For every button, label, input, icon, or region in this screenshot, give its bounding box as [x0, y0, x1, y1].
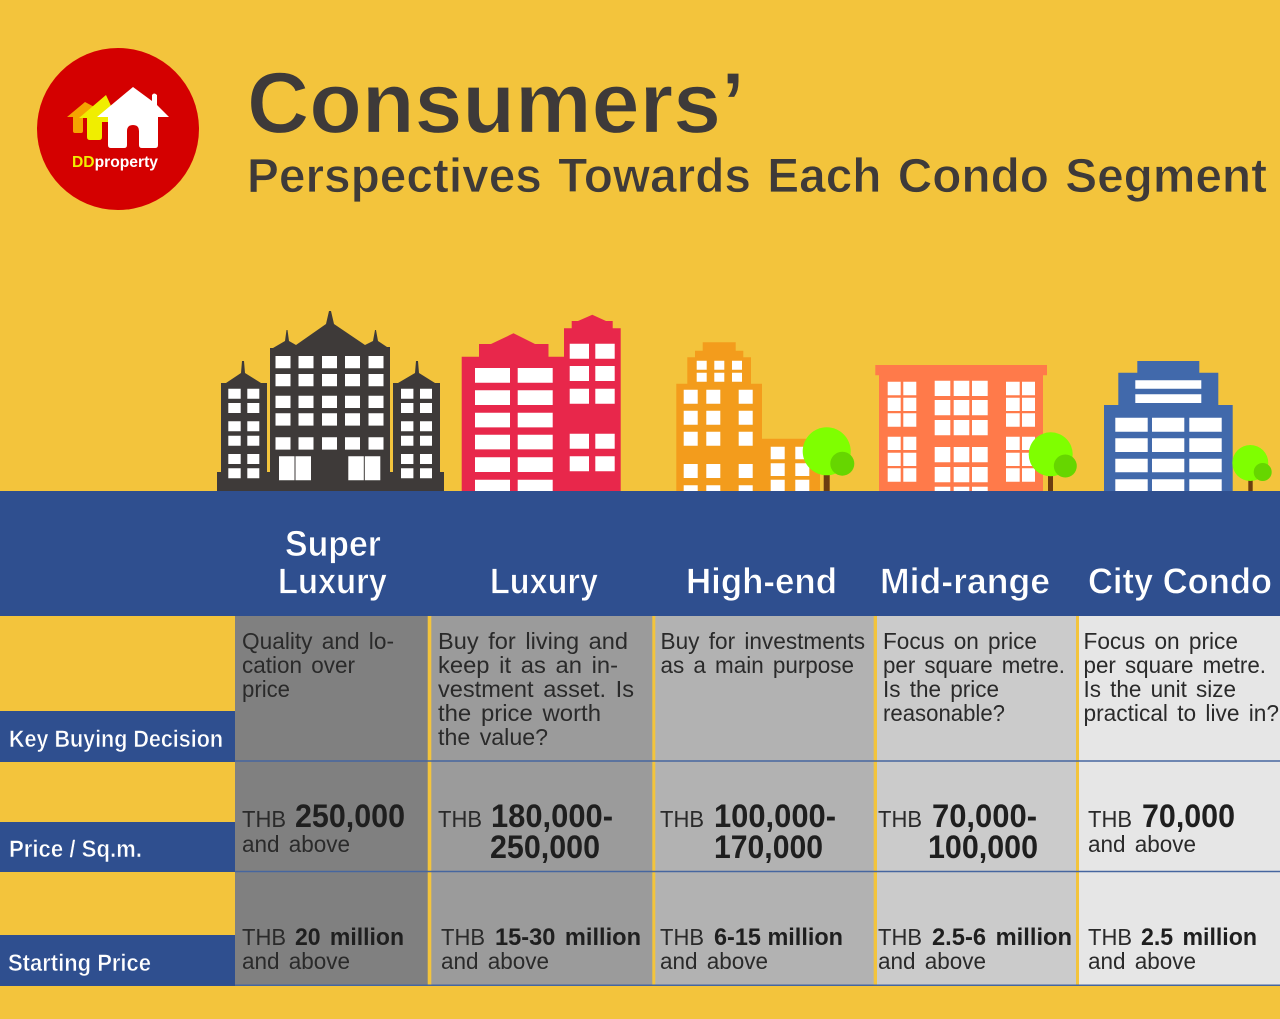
building: high-end orange tower — [676, 342, 820, 491]
text: starting price: and above — [660, 948, 768, 974]
icon: tree 2 — [1029, 432, 1077, 491]
text: starting price: and above — [242, 948, 350, 974]
text: price per sqm: and above — [242, 831, 350, 857]
text: starting price: THB — [878, 924, 922, 950]
text: price per sqm: THB — [660, 806, 704, 832]
text: key buying decision: per square metre. — [1084, 652, 1266, 678]
text: price per sqm — [242, 798, 405, 857]
text: key buying decision: reasonable? — [883, 700, 1005, 726]
building: mid-range coral block — [875, 365, 1047, 491]
column: Mid-range — [877, 616, 1076, 985]
row label: Starting Price — [0, 935, 235, 986]
text: starting price — [878, 924, 1072, 974]
subtitle: Perspectives Towards Each Condo Segment — [247, 150, 1267, 203]
text: key buying decision: keep it as an in- — [438, 652, 618, 678]
building: city condo blue block — [1104, 361, 1233, 491]
text: price per sqm — [1088, 798, 1235, 857]
text: key buying decision — [242, 628, 394, 702]
text: key buying decision: Focus on price — [883, 628, 1037, 654]
text: price per sqm: 170,000 — [714, 829, 823, 865]
icon: tree 3 — [1232, 445, 1272, 491]
icon: white house — [97, 87, 169, 148]
column heading: Super Luxury — [278, 523, 387, 602]
text: price per sqm — [438, 798, 613, 865]
text: key buying decision: as a main purpose — [660, 652, 854, 678]
text: starting price: THB — [242, 924, 286, 950]
logo wordmark: DDproperty — [72, 154, 158, 171]
text: starting price: 15-30 million — [495, 924, 641, 951]
text: key buying decision: price — [242, 676, 290, 702]
column heading: High-end: High-end — [686, 560, 837, 602]
text: price per sqm: THB — [242, 806, 286, 832]
text: starting price: THB — [660, 924, 704, 950]
column heading: City Condo: City Condo — [1088, 560, 1272, 602]
text: starting price — [1088, 924, 1257, 974]
text: key buying decision: Quality and lo- — [242, 628, 394, 654]
column heading: Luxury: Luxury — [490, 560, 598, 602]
text: key buying decision — [883, 628, 1065, 726]
text: key buying decision — [1084, 628, 1279, 726]
column heading: Super Luxury: Super — [285, 523, 381, 564]
text: key buying decision: Focus on price — [1084, 628, 1238, 654]
text: starting price — [660, 924, 843, 974]
icon: yellow house — [79, 95, 112, 140]
text: starting price — [441, 924, 641, 974]
text: starting price — [242, 924, 404, 974]
text: starting price: 6-15 million — [714, 924, 843, 951]
text: price per sqm: THB — [878, 806, 922, 832]
text: price per sqm: THB — [438, 806, 482, 832]
text: price per sqm — [878, 798, 1038, 865]
row label: Price / Sq.m.: Price / Sq.m. — [9, 836, 142, 863]
text: price per sqm: 100,000- — [714, 798, 836, 834]
text: key buying decision: cation over — [242, 652, 355, 678]
text: starting price: and above — [878, 948, 986, 974]
column: High-end — [655, 616, 874, 985]
text: starting price: and above — [441, 948, 549, 974]
text: price per sqm: 250,000 — [295, 798, 405, 834]
text: starting price: 2.5 million — [1141, 924, 1257, 951]
column heading: Super Luxury: Luxury — [278, 560, 387, 602]
title: Consumers’ — [247, 56, 745, 152]
text: starting price: 20 million — [295, 924, 404, 951]
text: price per sqm — [660, 798, 836, 865]
column: Luxury — [431, 616, 652, 985]
text: price per sqm: 70,000- — [932, 798, 1037, 834]
column heading: Mid-range: Mid-range — [880, 560, 1050, 602]
text: key buying decision — [660, 628, 865, 678]
text: price per sqm: 250,000 — [490, 829, 600, 865]
text: price per sqm: THB — [1088, 806, 1132, 832]
text: key buying decision: Is the unit size — [1084, 676, 1236, 702]
text: key buying decision: Is the price — [883, 676, 999, 702]
text: key buying decision: Buy for investments — [660, 628, 865, 654]
header band — [0, 491, 1280, 616]
building: luxury red block — [462, 315, 621, 491]
text: price per sqm: 70,000 — [1142, 798, 1235, 834]
text: starting price: THB — [1088, 924, 1132, 950]
column: Super Luxury — [235, 616, 428, 985]
row label: Price / Sq.m. — [0, 822, 235, 872]
logo: DDproperty — [37, 48, 199, 210]
text: key buying decision: the price worth — [438, 700, 601, 726]
text: price per sqm: 100,000 — [928, 829, 1038, 865]
text: key buying decision — [438, 628, 634, 750]
text: price per sqm: and above — [1088, 831, 1196, 857]
row label: Key Buying Decision — [0, 711, 235, 762]
row label: Starting Price: Starting Price — [8, 950, 151, 977]
text: key buying decision: practical to live in? — [1084, 700, 1279, 726]
text: key buying decision: per square metre. — [883, 652, 1065, 678]
icon: tree 1 — [803, 427, 854, 491]
text: starting price: 2.5-6 million — [932, 924, 1072, 951]
row label: Key Buying Decision: Key Buying Decision — [9, 726, 223, 753]
building: super luxury dark towers — [217, 311, 444, 491]
column: City Condo — [1079, 616, 1280, 985]
text: key buying decision: the value? — [438, 724, 548, 750]
text: key buying decision: Buy for living and — [438, 628, 628, 654]
text: starting price: and above — [1088, 948, 1196, 974]
text: starting price: THB — [441, 924, 485, 950]
text: price per sqm: 180,000- — [491, 798, 613, 834]
text: key buying decision: vestment asset. Is — [438, 676, 634, 702]
icon: orange house — [67, 102, 100, 133]
